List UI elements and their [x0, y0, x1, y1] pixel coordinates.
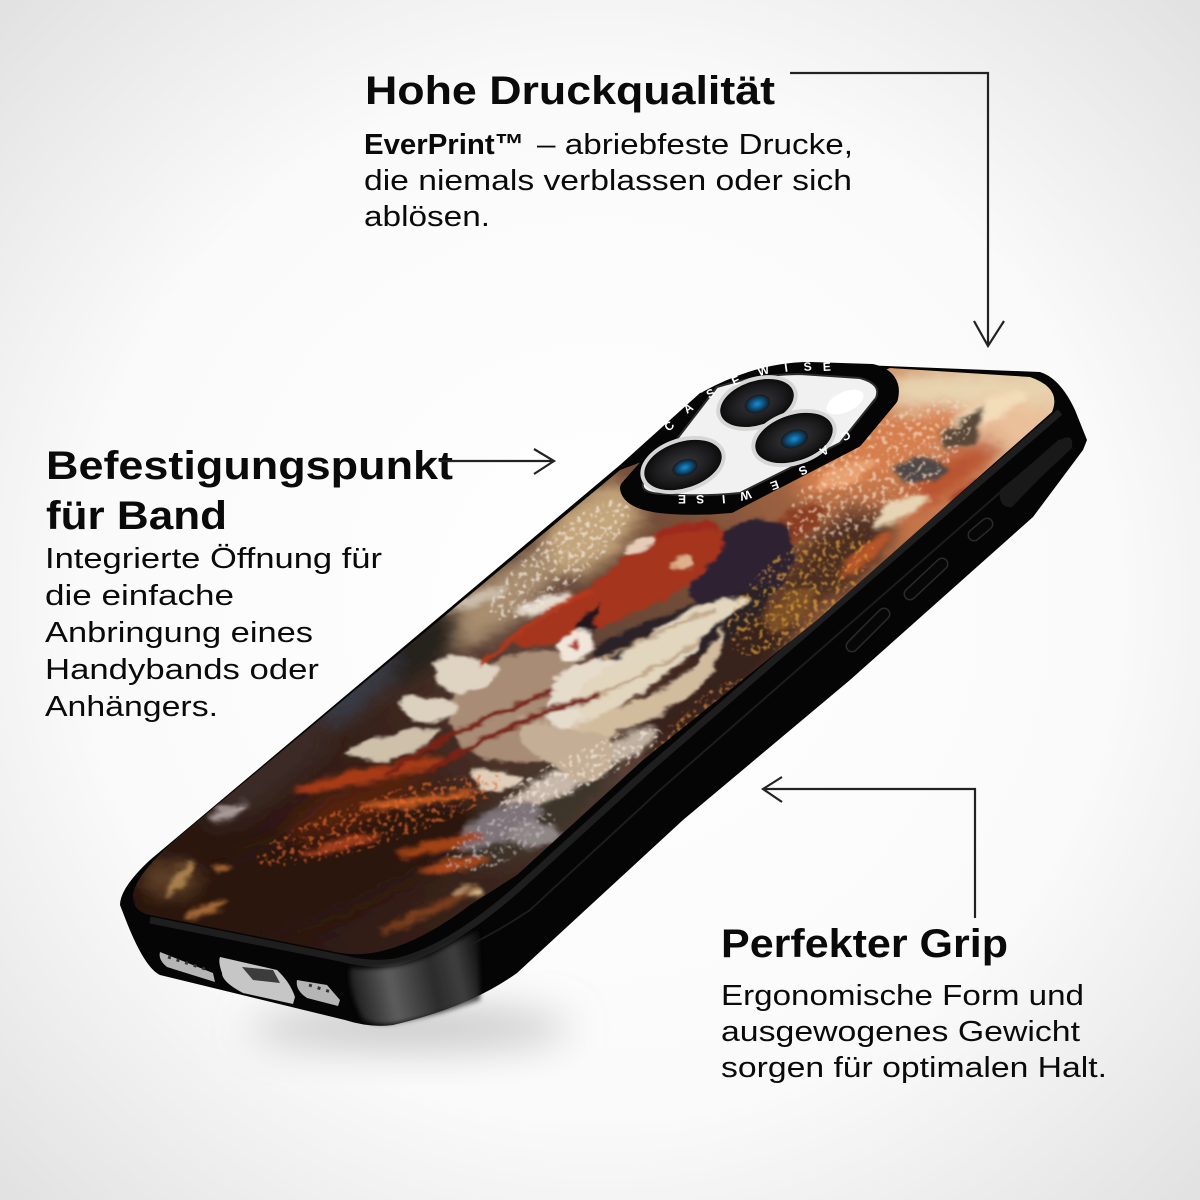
- body: strap attachment: Integrierte Öffnung für: [45, 543, 382, 575]
- fox body and tails: [345, 590, 752, 791]
- body: print quality: ablösen.: [364, 201, 490, 233]
- body: print quality: [364, 129, 853, 233]
- heading: strap attachment: Befestigungspunkt: [46, 444, 453, 488]
- lens right: [744, 399, 844, 477]
- heading: strap attachment: [46, 444, 453, 538]
- body: grip: ausgewogenes Gewicht: [721, 1016, 1080, 1048]
- heading: strap attachment: für Band: [46, 494, 227, 538]
- speaker grille left: [160, 952, 215, 982]
- heading: grip: Perfekter Grip: [721, 922, 1008, 966]
- body: grip: Ergonomische Form und: [721, 980, 1084, 1012]
- corner sheen: [350, 930, 480, 1024]
- camera bump: [628, 359, 891, 507]
- printed artwork: [132, 368, 1054, 954]
- callout: grip: [721, 922, 1107, 1084]
- body: print quality: die niemals verblassen oder sich: [364, 165, 852, 197]
- heading: print quality: Hohe Druckqualität: [365, 69, 775, 113]
- body: grip: sorgen für optimalen Halt.: [721, 1052, 1107, 1084]
- lens top: [709, 365, 805, 441]
- callout: print quality: [364, 69, 853, 233]
- side seam: [470, 440, 1060, 945]
- phone drop shadow: [250, 1006, 570, 1050]
- red disc, dark disc and red swoosh: [510, 517, 796, 662]
- arrow: print quality: [790, 73, 1004, 346]
- body: strap attachment: Anbringung eines: [45, 617, 313, 649]
- ring lettering: CASEWISE: [661, 359, 831, 434]
- camera window: [643, 374, 877, 495]
- phone case illustration: [100, 340, 1100, 1026]
- charging port: [219, 957, 295, 1004]
- side switch: [1000, 437, 1072, 507]
- orange flecks and blossoms: [256, 400, 972, 873]
- body: strap attachment: die einfache: [45, 580, 234, 612]
- body: print quality: – abriebfeste Drucke,: [537, 129, 853, 161]
- lens left: [633, 426, 733, 504]
- case body: [120, 363, 1087, 1026]
- side buttons: [852, 524, 987, 646]
- body: strap attachment: Handybands oder: [45, 654, 319, 686]
- body: grip: [721, 980, 1107, 1084]
- speaker grille right: [297, 980, 340, 1006]
- body: strap attachment: [45, 543, 382, 723]
- camera bump: CASEWISE: [678, 428, 853, 506]
- rim highlight: [150, 412, 1060, 963]
- arrow: strap attachment: [440, 449, 554, 474]
- callout: strap attachment: [45, 444, 453, 723]
- body: print quality: EverPrint™: [364, 129, 524, 161]
- body: strap attachment: Anhängers.: [45, 691, 218, 723]
- arrow: grip: [763, 777, 975, 918]
